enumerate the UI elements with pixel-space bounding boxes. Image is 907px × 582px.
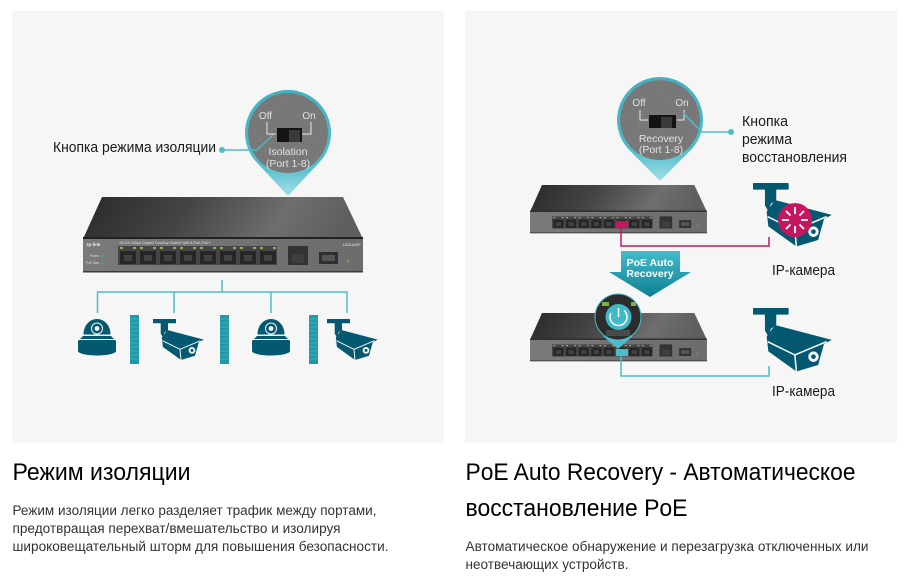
callout line: recovery button: [683, 113, 734, 135]
icon: dome camera 1: [78, 319, 116, 356]
text block: recovery description: неотвечающих устройств.: [466, 557, 628, 572]
switch: isolation mode: PoE Max: [86, 261, 99, 265]
callout pin: isolation switch: On: [302, 111, 316, 122]
panel: PoE auto recovery: [465, 11, 897, 443]
icon: bullet camera 2: [327, 319, 378, 360]
callout pin: recovery switch: On: [675, 98, 689, 109]
heading: PoE auto recovery: восстановление PoE: [466, 495, 688, 522]
callout line: isolation button: [219, 135, 273, 153]
switch: isolation mode: LS1210GP: [343, 243, 361, 247]
icon: bullet camera 1: [153, 319, 204, 360]
icon: dome camera 2: [252, 319, 290, 356]
heading: PoE auto recovery: [466, 459, 856, 522]
switch: isolation mode: Power: [90, 254, 100, 258]
label: IP camera lower: IP-камера: [772, 383, 836, 400]
callout pin: isolation switch: (Port 1-8): [266, 158, 310, 170]
arrow: PoE Auto Recovery: PoE Auto: [627, 257, 673, 269]
arrow: PoE Auto Recovery: [609, 251, 691, 297]
text block: isolation description: предотвращая перехват/вмешательство и изолируя: [12, 521, 340, 536]
switch: isolation mode: tp-link: [87, 242, 101, 247]
callout pin: recovery switch: Recovery: [639, 133, 684, 145]
text block: isolation description: [12, 503, 388, 554]
panel: isolation mode: [12, 11, 444, 443]
port highlight and pink link: [616, 221, 769, 246]
switch: lower: [530, 313, 707, 361]
callout pin: recovery switch: (Port 1-8): [639, 144, 683, 156]
switch: upper: [530, 185, 707, 233]
callout pin: isolation switch: Off: [259, 111, 272, 122]
label: isolation button: Кнопка режима изоляции: [53, 139, 216, 156]
icon: firewall 1: [130, 315, 139, 364]
port highlight and teal link: [616, 349, 769, 376]
label: recovery button: Кнопка: [742, 113, 789, 130]
callout pin: recovery switch: [617, 77, 703, 181]
text block: recovery description: [466, 539, 868, 572]
label: recovery button: восстановления: [742, 149, 847, 166]
switch: isolation mode: 10/100 Mbps Gigabit Desktop Switch with 8-Port PoE+: [119, 241, 212, 245]
label: recovery button: режима: [742, 131, 793, 148]
icon: failed IP camera: [753, 183, 832, 247]
arrow: PoE Auto Recovery: Recovery: [626, 268, 674, 280]
callout pin: isolation switch: Isolation: [268, 146, 308, 158]
callout pin: recovery switch: Off: [632, 98, 646, 109]
callout pin: isolation switch: [245, 90, 331, 196]
restart badge: [595, 294, 641, 349]
text block: isolation description: Режим изоляции легко разделяет трафик между портами,: [12, 503, 376, 518]
text block: recovery description: Автоматическое обнаружение и перезагрузка отключенных или: [466, 539, 868, 554]
switch: isolation mode: [83, 197, 363, 272]
label: IP camera upper: IP-камера: [772, 262, 836, 279]
label: recovery button: [742, 113, 847, 166]
network tree lines: [98, 280, 347, 313]
icon: firewall 2: [220, 315, 229, 364]
icon: firewall 3: [309, 315, 318, 364]
heading: isolation mode: Режим изоляции: [12, 459, 190, 486]
icon: recovered IP camera: [753, 308, 832, 372]
heading: PoE auto recovery: PoE Auto Recovery - Автоматическое: [466, 459, 856, 486]
text block: isolation description: широковещательный шторм для повышения безопасности.: [12, 539, 388, 554]
